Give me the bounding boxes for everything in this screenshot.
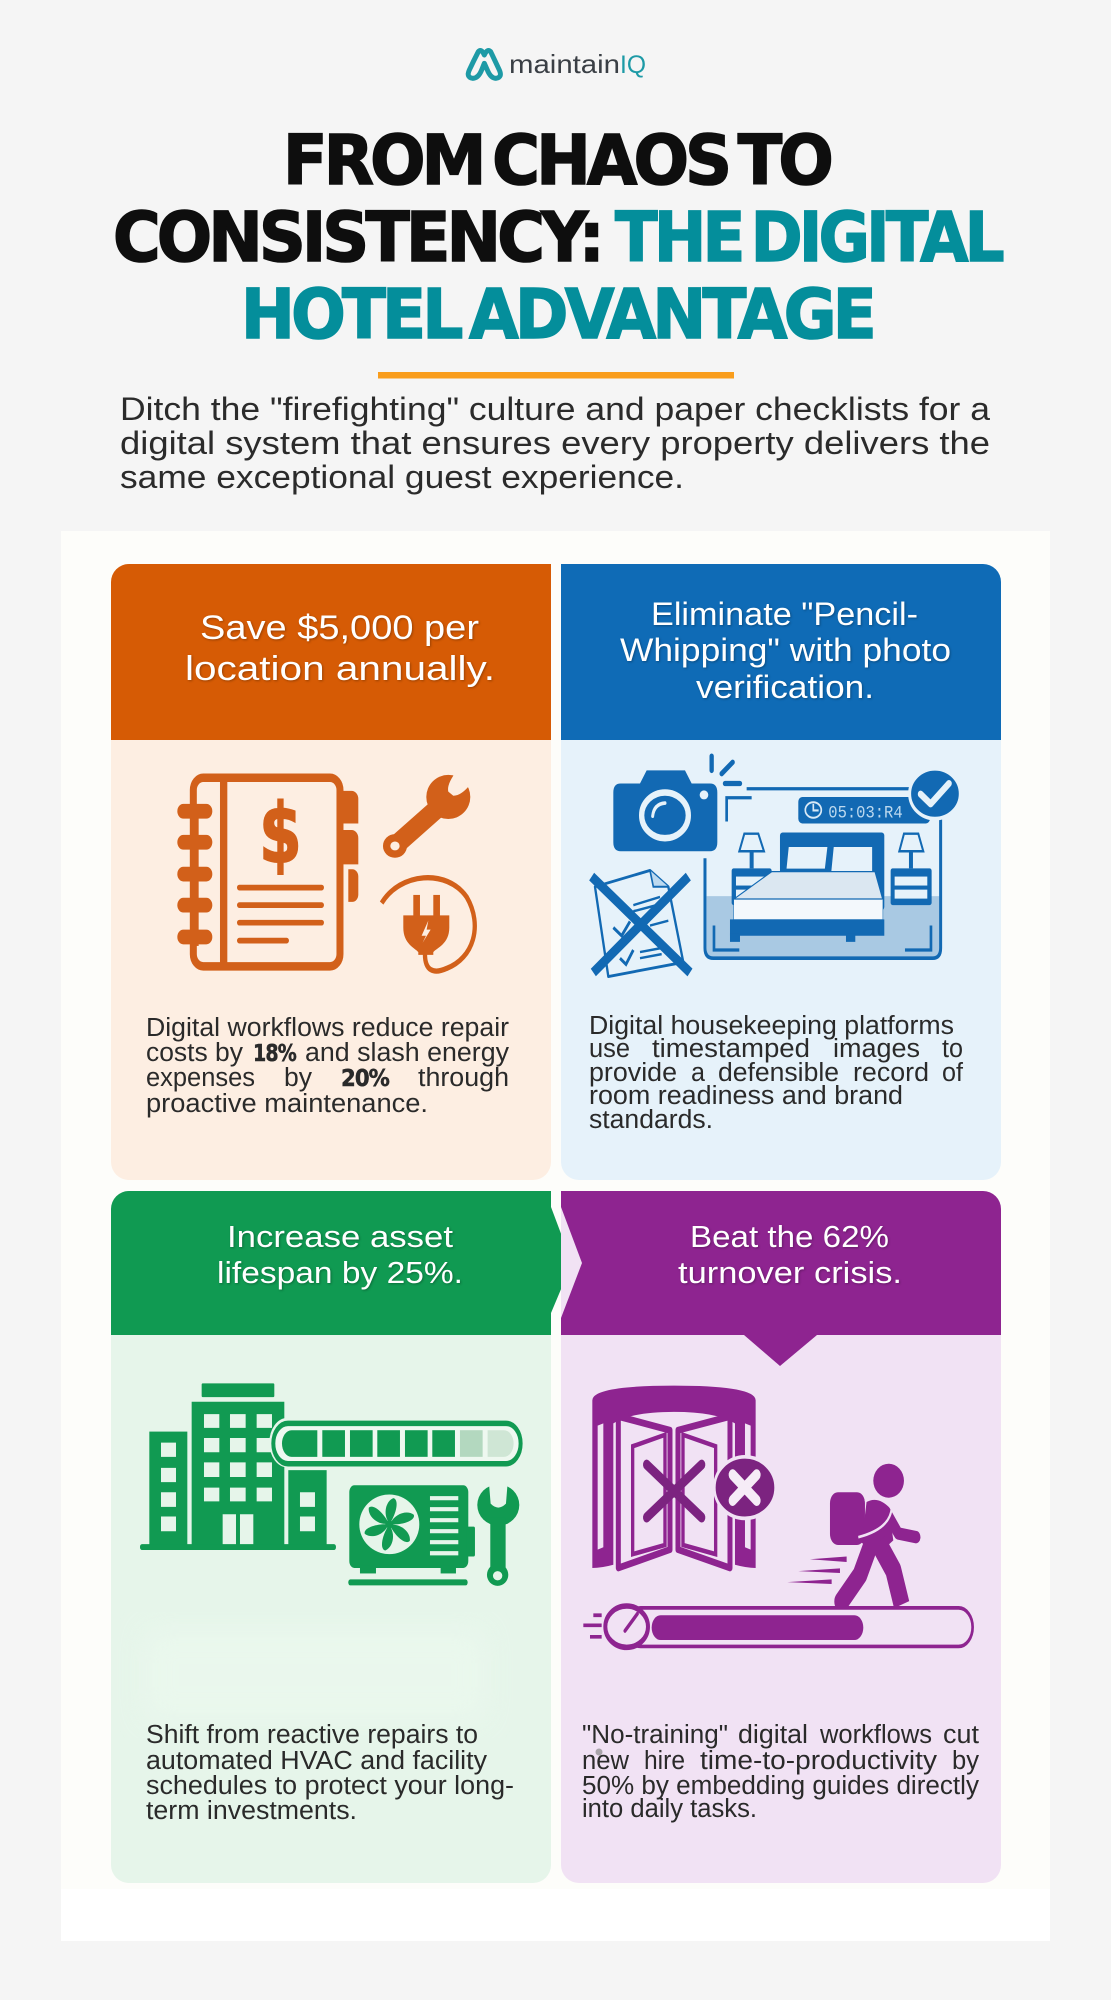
body text	[146, 1014, 510, 1118]
body text: use	[589, 1035, 630, 1063]
body text	[582, 1721, 979, 1823]
logo: maintainIQ	[468, 49, 646, 79]
body text: Shift from reactive repairs to	[146, 1721, 478, 1749]
body text: by	[284, 1064, 312, 1092]
body text: of	[942, 1059, 964, 1087]
green header with arrow: lifespan by 25%.	[217, 1255, 463, 1290]
body text: by	[952, 1747, 979, 1775]
green header with arrow: Increase asset	[227, 1219, 453, 1254]
intro text: same exceptional guest experience.	[120, 459, 684, 495]
purple header with notch and pointer: turnover crisis.	[678, 1255, 902, 1290]
intro text: Ditch the "firefighting" culture and paper checklists for a	[120, 391, 990, 427]
body text: "No-training"	[582, 1721, 728, 1749]
title: HOTEL ADVANTAGE	[241, 275, 873, 355]
panel: save money (orange)	[111, 564, 551, 1180]
soft light patch	[145, 1630, 485, 1720]
body text: room readiness and brand	[589, 1082, 903, 1110]
body text: workflows	[819, 1721, 932, 1749]
body text: 20%	[341, 1066, 390, 1092]
body text: through	[418, 1064, 509, 1092]
blue header: Whipping" with photo	[620, 632, 951, 668]
body text: standards.	[589, 1106, 713, 1134]
orange header	[111, 564, 551, 740]
icon: hotel buildings, lifespan bar, HVAC unit and wrench	[140, 1383, 525, 1586]
blue header: verification.	[696, 669, 874, 705]
body text: expenses	[146, 1064, 255, 1092]
title underline accent	[378, 372, 734, 378]
body text: provide	[589, 1059, 677, 1087]
body text: schedules to protect your long-	[146, 1772, 514, 1800]
icon: ledger, wrench and plug: $	[259, 786, 302, 882]
purple header with notch and pointer	[561, 1191, 1001, 1366]
body text: record	[853, 1059, 929, 1087]
body text	[589, 1012, 964, 1134]
icon: camera, timestamped bedroom and crossed-out checklist: 05:03:R4	[828, 802, 903, 823]
panel: photo verification (blue)	[561, 564, 1001, 1180]
body text: digital	[738, 1721, 808, 1749]
logo: maintainIQ: maintain	[509, 49, 620, 79]
intro text: digital system that ensures every property delivers the	[120, 425, 990, 461]
panel: asset lifespan (green)	[111, 1191, 572, 1883]
title: THE DIGITAL	[615, 198, 1004, 278]
body text: automated HVAC and facility	[146, 1747, 487, 1775]
title	[113, 121, 1004, 355]
icon: revolving door, leaving employee and progress bar	[583, 1386, 973, 1650]
orange header: Save $5,000 per	[200, 609, 479, 647]
intro text	[120, 391, 990, 495]
body text: new	[582, 1747, 630, 1775]
blue header: Eliminate "Pencil-	[651, 596, 918, 632]
body text: 50% by embedding guides directly	[582, 1772, 979, 1800]
title: FROM CHAOS TO	[283, 121, 831, 201]
panel: turnover crisis (purple)	[561, 1191, 1001, 1883]
icon: camera, timestamped bedroom and crossed-out checklist	[592, 756, 960, 977]
body text: 18%	[253, 1041, 297, 1067]
body text: hire	[644, 1747, 685, 1775]
green header with arrow	[111, 1191, 572, 1335]
body text: time-to-productivity	[700, 1747, 937, 1775]
body text: to	[942, 1035, 963, 1063]
icon: ledger, wrench and plug	[177, 766, 475, 971]
body text: timestamped	[652, 1035, 810, 1063]
body text: costs by	[146, 1039, 243, 1067]
blue header	[561, 564, 1001, 740]
body text: Digital housekeeping platforms	[589, 1012, 954, 1040]
body text: images	[833, 1035, 920, 1063]
orange header: location annually.	[185, 650, 495, 688]
purple header with notch and pointer: Beat the 62%	[690, 1219, 889, 1254]
body text: Digital workflows reduce repair	[146, 1014, 510, 1042]
content sheet	[61, 531, 1050, 1941]
body text: and slash energy	[305, 1039, 509, 1067]
title: CONSISTENCY:	[113, 198, 601, 278]
body text: a	[691, 1059, 706, 1087]
logo: maintainIQ: IQ	[620, 51, 646, 79]
body text: term investments.	[146, 1797, 357, 1825]
body text: into daily tasks.	[582, 1795, 757, 1823]
body text: defensible	[718, 1059, 839, 1087]
body text	[146, 1721, 514, 1825]
body text: proactive maintenance.	[146, 1090, 428, 1118]
body text: cut	[943, 1721, 979, 1749]
